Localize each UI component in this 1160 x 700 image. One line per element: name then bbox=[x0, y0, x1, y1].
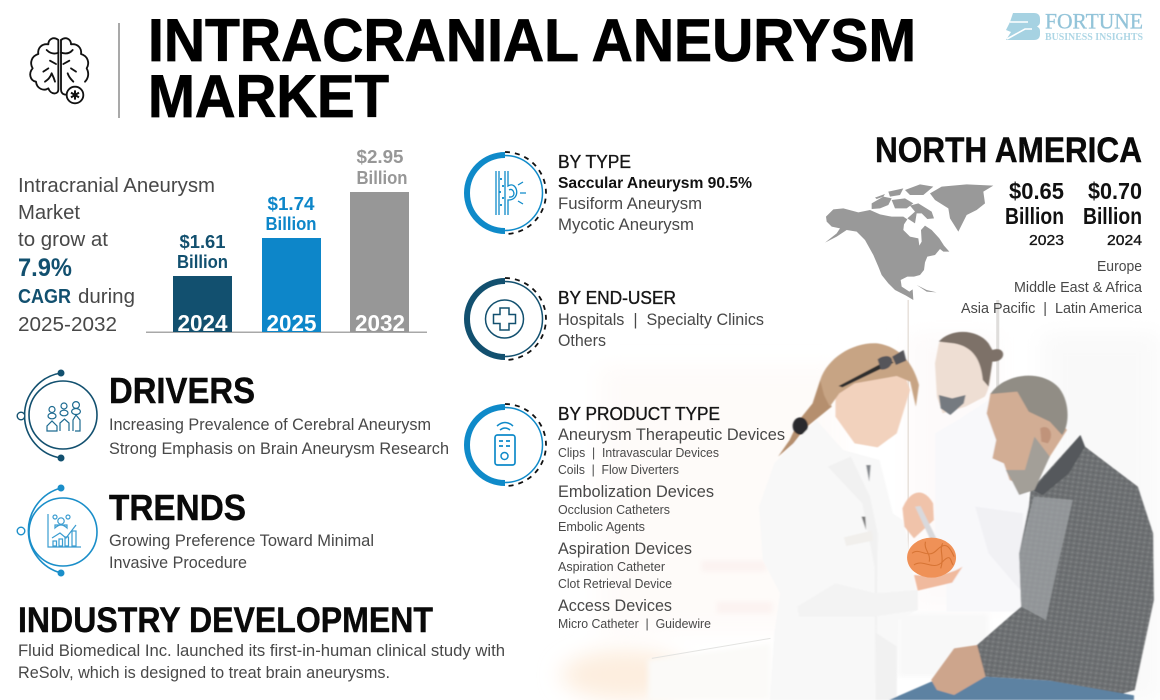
bar 2025: $1.74 bbox=[268, 194, 314, 214]
text: product type list: Micro Catheter | Guidewire bbox=[558, 617, 711, 631]
values: 2024: $0.70 bbox=[1088, 178, 1142, 204]
text: drivers list: Strong Emphasis on Brain Aneurysm Research bbox=[109, 440, 449, 458]
bar 2025: 2025 bbox=[266, 310, 317, 336]
icon: brain bbox=[30, 38, 88, 103]
bar 2032: $2.95 bbox=[356, 147, 404, 167]
logo: Fortune Business Insights: FORTUNE bbox=[1045, 8, 1143, 34]
title bbox=[148, 7, 916, 130]
standing man bbox=[935, 400, 1029, 612]
text: trends list: Invasive Procedure bbox=[109, 554, 247, 572]
text: product type list: Clips | Intravascular Devices bbox=[558, 446, 719, 460]
title divider bbox=[118, 23, 120, 118]
bar 2025: Billion bbox=[266, 214, 316, 234]
bar 2032: Billion bbox=[356, 168, 408, 188]
panel: by type bbox=[467, 152, 752, 234]
market growth text: Market bbox=[18, 202, 80, 224]
bar 2025 bbox=[262, 194, 321, 336]
heading: trends: TRENDS bbox=[109, 487, 246, 528]
text: other regions bbox=[961, 258, 1143, 317]
map: north america bbox=[825, 184, 993, 300]
text: product type list: Aspiration Catheter bbox=[558, 560, 665, 574]
doctor lower hand bbox=[914, 567, 963, 591]
bar 2032: 2032 bbox=[355, 310, 405, 336]
bar 2024: 2024 bbox=[178, 310, 228, 336]
values: 2023 bbox=[1005, 178, 1064, 249]
heading: industry development: INDUSTRY DEVELOPMENT bbox=[18, 601, 433, 640]
doctor upper hand bbox=[902, 493, 934, 538]
market growth text: 7.9% bbox=[18, 254, 72, 282]
bar 2024: Billion bbox=[177, 252, 228, 272]
photo: doctor showing brain model to patient bbox=[562, 300, 1160, 700]
market growth text: 2025-2032 bbox=[18, 314, 117, 336]
text: product type list: Coils | Flow Diverters bbox=[558, 463, 679, 477]
window and wall bbox=[562, 300, 1160, 700]
bar chart bbox=[146, 147, 427, 336]
text: product type list: Clot Retrieval Device bbox=[558, 577, 672, 591]
text: development description: ReSolv, which is designed to treat brain aneurysms. bbox=[18, 664, 390, 682]
text: development description bbox=[18, 642, 505, 682]
doctor face bbox=[836, 373, 910, 447]
doctor coat bbox=[759, 420, 918, 700]
patient sweater bbox=[975, 435, 1154, 696]
patient hands bbox=[931, 645, 986, 695]
bar 2032 bbox=[350, 147, 409, 336]
text: product type list: Embolic Agents bbox=[558, 520, 645, 534]
text: other regions: Europe bbox=[1097, 258, 1142, 275]
values: 2024: Billion bbox=[1083, 203, 1142, 229]
logo: Fortune Business Insights: BUSINESS INSIGHTS bbox=[1045, 32, 1143, 43]
text: end-user list bbox=[558, 311, 764, 350]
panel: by end-user bbox=[467, 278, 764, 360]
patient head bbox=[987, 380, 1067, 490]
text: product type list: Access Devices bbox=[558, 597, 672, 615]
market growth text: CAGR bbox=[18, 286, 71, 308]
text: trends list bbox=[109, 532, 374, 572]
icon: remote device bbox=[467, 404, 546, 486]
text: end-user list: Others bbox=[558, 332, 606, 350]
text: end-user list: Hospitals | Specialty Clinics bbox=[558, 311, 764, 329]
panel: trends bbox=[17, 485, 374, 576]
values: 2023: $0.65 bbox=[1009, 178, 1064, 204]
text: trends list: Growing Preference Toward Minimal bbox=[109, 532, 374, 550]
market growth text: to grow at bbox=[18, 229, 108, 251]
text: drivers list bbox=[109, 416, 449, 458]
icon: trends chart bbox=[17, 485, 97, 576]
title: MARKET bbox=[148, 63, 389, 130]
bar 2024: $1.61 bbox=[180, 232, 226, 252]
panel: drivers bbox=[17, 370, 449, 461]
heading: by end-user: BY END-USER bbox=[558, 288, 676, 308]
heading: by type: BY TYPE bbox=[558, 152, 631, 172]
text: product type list: Embolization Devices bbox=[558, 483, 714, 501]
title: INTRACRANIAL ANEURYSM bbox=[148, 7, 916, 74]
values: 2024 bbox=[1083, 178, 1142, 249]
values: 2023: Billion bbox=[1005, 203, 1064, 229]
icon: drivers people bbox=[17, 370, 97, 461]
patient jeans bbox=[889, 677, 1134, 700]
text: product type list bbox=[558, 426, 785, 631]
values: 2023: 2023 bbox=[1029, 232, 1064, 249]
text: other regions: Middle East & Africa bbox=[1014, 279, 1143, 296]
text: product type list: Aspiration Devices bbox=[558, 540, 692, 558]
market growth text: Intracranial Aneurysm bbox=[18, 175, 215, 197]
heading: drivers: DRIVERS bbox=[109, 370, 255, 411]
panel: by product type bbox=[467, 404, 785, 631]
panel: industry development bbox=[18, 601, 505, 682]
logo: Fortune Business Insights bbox=[1006, 8, 1143, 43]
text: product type list: Occlusion Catheters bbox=[558, 503, 670, 517]
market growth text: during bbox=[78, 286, 135, 308]
bar 2024 bbox=[173, 232, 232, 336]
text: drivers list: Increasing Prevalence of Cerebral Aneurysm bbox=[109, 416, 431, 434]
doctor hair bbox=[820, 343, 919, 407]
text: product type list: Aneurysm Therapeutic Devices bbox=[558, 426, 785, 444]
panel: north america bbox=[825, 131, 1143, 317]
text: type list: Mycotic Aneurysm bbox=[558, 216, 694, 234]
doctor ponytail bbox=[778, 380, 832, 457]
icon: vessel aneurysm bbox=[467, 152, 546, 234]
brain model bbox=[907, 538, 956, 578]
values: 2024: 2024 bbox=[1107, 232, 1142, 249]
text: type list: Fusiform Aneurysm bbox=[558, 195, 702, 213]
text: type list: Saccular Aneurysm 90.5% bbox=[558, 175, 752, 192]
text: other regions: Asia Pacific | Latin America bbox=[961, 300, 1143, 317]
text: development description: Fluid Biomedical Inc. launched its first-in-human clinical study with bbox=[18, 642, 505, 660]
heading: by product type: BY PRODUCT TYPE bbox=[558, 404, 720, 424]
icon: medical cross bbox=[467, 278, 546, 360]
text: type list bbox=[558, 175, 752, 234]
market growth text bbox=[18, 175, 215, 336]
